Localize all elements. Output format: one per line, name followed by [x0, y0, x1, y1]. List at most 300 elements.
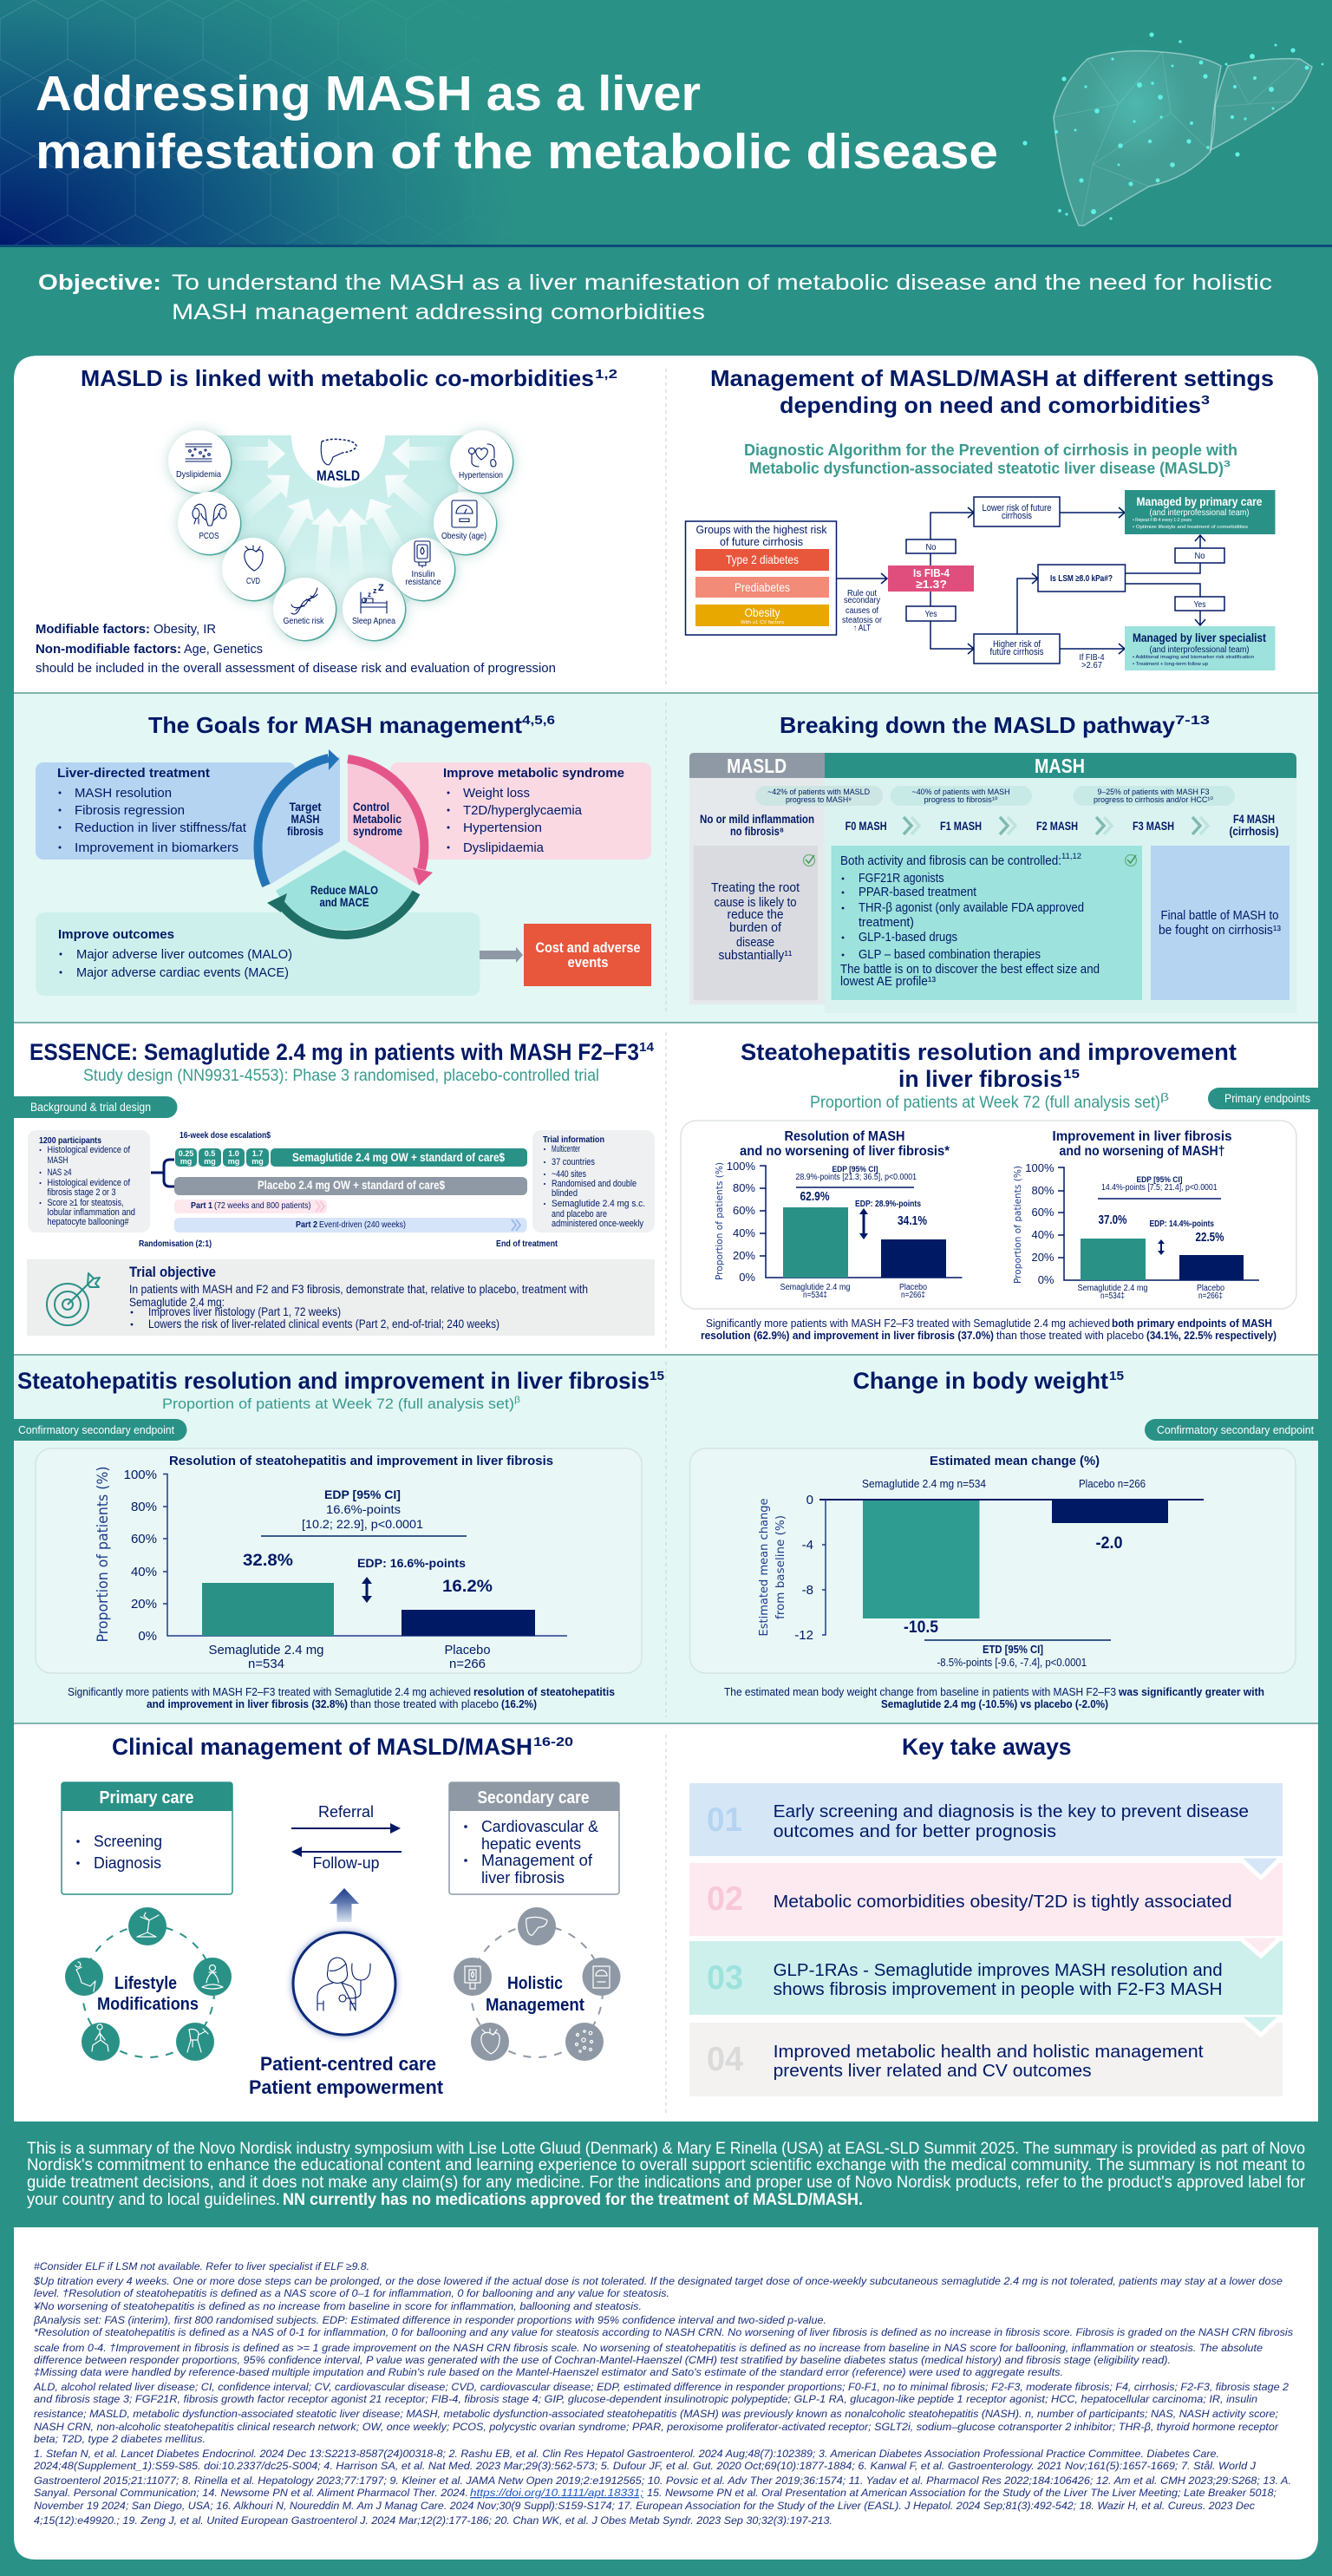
pill: progression cirrhosis: 9–25% of patients with MASH F3	[1098, 788, 1209, 796]
icon: weights	[176, 2023, 214, 2061]
card: secondary care: liver fibrosis	[481, 1869, 565, 1886]
box: high risk groups: Obesity	[744, 605, 780, 619]
icon: doctor	[293, 1932, 395, 2035]
chart: improvement in liver fibrosis: 37.0%	[1098, 1213, 1127, 1227]
stage labels: No or mild inflammation	[700, 812, 814, 826]
card: activity and fibrosis: THR-β agonist (only available FDA approved	[859, 901, 1084, 915]
panel: primary endpoints	[681, 1039, 1318, 1342]
takeaway 04: 04	[707, 2041, 743, 2078]
tab: primary endpoints	[1208, 1088, 1318, 1109]
heading: depending on need and comorbidities	[780, 392, 1201, 418]
card: primary care: Screening	[94, 1833, 162, 1850]
dose escalation	[175, 1130, 271, 1167]
dose escalation: 1.7	[252, 1149, 263, 1158]
text block: abbreviations and footnotes: ‡Missing data were handled by reference-based multiple imputation and Rubin's rule based on the Mantel-Haenszel estimator and Sato's estimate of the standard error (reference) were used to aggregate results.	[34, 2366, 1063, 2378]
box: lower risk: cirrhosis	[1002, 511, 1032, 521]
heading: in liver fibrosis	[898, 1066, 1062, 1092]
text block: abbreviations and footnotes	[33, 2260, 1293, 2527]
note: if FIB-4: If FIB-4	[1079, 653, 1105, 663]
card: activity and fibrosis: The battle is on to discover the best effect size and	[840, 963, 1100, 977]
panel: key take aways	[689, 1734, 1283, 2096]
heading: 7-13	[1175, 713, 1210, 728]
arc arrow: teal	[267, 892, 416, 935]
node: PCOS	[178, 492, 241, 555]
card: activity and fibrosis: PPAR-based treatment	[859, 886, 976, 899]
box: managed by primary care: • Optimize lifestyle and treatment of comorbidities	[1133, 525, 1249, 530]
box: FIB-4	[888, 566, 974, 592]
bar: part 2: Part 2	[296, 1219, 317, 1230]
note: rule out: ↑ ALT	[853, 624, 871, 633]
card: activity and fibrosis: Both activity and fibrosis can be controlled:	[840, 854, 1061, 868]
card: participants: Score ≥1 for steatosis,	[47, 1198, 123, 1208]
card: activity and fibrosis: FGF21R agonists	[859, 872, 944, 886]
card: improve metabolic syndrome: Improve metabolic syndrome	[443, 766, 624, 781]
note: if FIB-4	[1079, 653, 1105, 670]
pill: progression fibrosis: ~40% of patients with MASH	[912, 788, 1009, 796]
card: trial information: Randomised and double	[552, 1179, 637, 1189]
text block: abbreviations and footnotes: *Resolution of steatohepatitis is defined as a NAS of 0-1 for inflammation, 0 for ballooning and any value for steatosis according to NASH CRN. No worsening of liver fibrosis is defined as no increase in fibrosis score. Fibrosis is graded on the NASH CRN fibrosis	[34, 2326, 1293, 2338]
stage labels: F1 MASH	[940, 819, 982, 833]
heading	[710, 365, 1274, 418]
chart: resolution and fibrosis improvement: 60%	[131, 1532, 157, 1546]
subheading: β	[514, 1396, 520, 1405]
box: managed by liver specialist: • Treatment + long-term follow up	[1133, 662, 1208, 667]
card: treating root cause: burden of	[729, 921, 782, 935]
chart: improvement in liver fibrosis: n=534‡	[1100, 1291, 1125, 1301]
chart: improvement in liver fibrosis	[1012, 1129, 1259, 1301]
card: improve outcomes: Major adverse liver outcomes (MALO)	[76, 947, 292, 962]
bar: part 1: Part 1	[191, 1200, 212, 1211]
caption: Significantly more patients with MASH F2–F3 treated with Semaglutide 2.4 mg achieved	[706, 1317, 1110, 1330]
chart: improvement in liver fibrosis: and no worsening of MASH†	[1060, 1144, 1224, 1159]
dose escalation: mg	[228, 1157, 239, 1166]
box: high risk groups: With ≥1 CV factors	[741, 620, 784, 625]
note: rule out: causes of	[846, 606, 878, 616]
panel: section row 4 background	[14, 1355, 1318, 1724]
card: activity and fibrosis: treatment)	[859, 916, 914, 930]
text block: abbreviations and footnotes: and fibrosis stage 3; FGF21R, fibrosis growth factor receptor agonist 21 receptor; FIB-4, fibrosis stage 4; GIP, glucose-dependent insulinotropic polypeptide; GLP-1 RA, glucagon-like peptide 1 receptor agonist; HCC, hepatocellular carcinoma; IR, insulin	[34, 2393, 1257, 2405]
card: primary care: Primary care	[99, 1788, 194, 1808]
chart: resolution of MASH: Placebo	[899, 1283, 927, 1292]
card: chart	[690, 1448, 1296, 1673]
caption: The estimated mean body weight change from baseline in patients with MASH F2–F3	[724, 1685, 1116, 1698]
card: primary care: Diagnosis	[94, 1854, 161, 1872]
box: managed by primary care	[1125, 490, 1275, 534]
caption: than those treated with placebo	[996, 1329, 1144, 1342]
card: trial information: administered once-weekly	[552, 1219, 643, 1229]
takeaway 04: prevents liver related and CV outcomes	[774, 2061, 1092, 2081]
chart: resolution and fibrosis improvement: 80%	[131, 1500, 157, 1514]
bar: part 2	[174, 1218, 527, 1232]
icon: target	[47, 1273, 100, 1325]
box: managed by primary care: Managed by primary care	[1136, 494, 1263, 508]
box: managed by liver specialist: (and interprofessional team)	[1150, 644, 1249, 655]
text block: modifiable factors: should be included in the overall assessment of disease risk and evaluation of progression	[36, 661, 556, 676]
chart: resolution and fibrosis improvement: 32.8%	[243, 1552, 293, 1570]
label: target	[287, 800, 323, 838]
card: participants: 1200 participants	[39, 1135, 101, 1146]
label: reduce: Reduce MALO	[310, 883, 378, 897]
box: Yes (LSM): Yes	[1193, 599, 1205, 610]
bar: part 1: (72 weeks and 800 patients)	[214, 1200, 310, 1211]
diagram: lifestyle modifications: Lifestyle	[114, 1974, 177, 1993]
text block: abbreviations and footnotes: https://doi.org/10.1111/apt.18331;	[470, 2487, 643, 2499]
note: rule out: steatosis or	[842, 616, 883, 625]
icon: glucose meter	[454, 1958, 492, 1996]
stage labels: F3 MASH	[1133, 819, 1174, 833]
text block: abbreviations and footnotes: November 19 2024; San Diego, USA; 16. Alkhouri N, Noureddin M. Am J Manag Care. 2024 Nov;30(9 Suppl):S159-S174; 17. European Association for the Study of the Liver (EASL). J Hepatol. 2024 Sep;81(3):492-542; 18. Wazir H, et al. Cureus. 2023 Dec	[34, 2500, 1255, 2512]
chart: resolution of MASH: 0%	[739, 1271, 755, 1284]
heading: 14	[639, 1040, 655, 1055]
node: Hypertension	[450, 430, 513, 494]
chart: estimated mean change: Estimated mean change	[758, 1499, 771, 1636]
chart: estimated mean change: -2.0	[1096, 1534, 1122, 1553]
card: improve outcomes: Improve outcomes	[58, 927, 174, 942]
text block: abbreviations and footnotes: $Up titration every 4 weeks. One or more dose steps can be prolonged, or the dose lowered if the actual dose is not tolerated. If the designated target dose of once-weekly subcutaneous semaglutide 2.4 mg is not tolerated, patients may stay at a lower dose	[33, 2275, 1283, 2287]
timeline labels: Randomisation (2:1)	[139, 1239, 212, 1249]
panel: section row 3 background	[14, 1023, 1318, 1355]
takeaway 01: 01	[707, 1801, 742, 1839]
diagram: holistic management	[454, 1907, 621, 2061]
card: treating root cause	[694, 846, 818, 1000]
heading: Breaking down the MASLD pathway	[780, 712, 1176, 738]
arrow: follow-up	[291, 1847, 402, 1872]
chart: estimated mean change: Placebo n=266	[1079, 1478, 1146, 1490]
card: secondary care: hepatic events	[481, 1835, 581, 1853]
text block: modifiable factors: Non-modifiable factors:	[36, 642, 181, 657]
text block: symposium disclaimer: your country and to local guidelines.	[27, 2191, 280, 2209]
card: trial information: 37 countries	[552, 1157, 595, 1167]
icon: check	[803, 855, 815, 866]
card: treating root cause: reduce the	[727, 908, 784, 922]
chart: resolution and fibrosis improvement: 20%	[131, 1597, 157, 1612]
box: cost and adverse events: events	[567, 954, 609, 971]
chart: resolution of MASH: 60%	[733, 1204, 755, 1217]
subheading: Proportion of patients at Week 72 (full analysis set)	[162, 1396, 514, 1412]
box: No (LSM): No	[1195, 551, 1205, 561]
bar: placebo arm: Placebo 2.4 mg OW + standard of care$	[258, 1178, 445, 1192]
note: rule out: secondary	[844, 596, 880, 605]
caption: resolution (62.9%) and improvement in liver fibrosis (37.0%)	[701, 1329, 994, 1342]
takeaway 02: 02	[707, 1880, 743, 1918]
label: control: Metabolic	[353, 812, 402, 826]
chart: resolution and fibrosis improvement: n=266	[449, 1657, 486, 1671]
takeaway 01	[689, 1783, 1283, 1878]
card: secondary care	[449, 1782, 619, 1894]
chart: estimated mean change: -8.5%-points [-9.6, -7.4], p<0.0001	[937, 1657, 1087, 1669]
card: liver-directed treatment: Improvement in biomarkers	[75, 840, 238, 855]
tab: MASLD	[689, 753, 825, 778]
tab: confirmatory secondary endpoint: Confirmatory secondary endpoint	[18, 1423, 174, 1436]
chart: resolution and fibrosis improvement: 100%	[124, 1468, 157, 1482]
chart: resolution of MASH: and no worsening of liver fibrosis*	[740, 1144, 950, 1159]
chart: resolution and fibrosis improvement: Proportion of patients (%)	[95, 1466, 112, 1643]
text block: symposium disclaimer: NN currently has no medications approved for the treatment of MASLD/MASH.	[283, 2191, 863, 2209]
chart: improvement in liver fibrosis: n=266‡	[1198, 1291, 1223, 1301]
card: treating root cause: cause is likely to	[715, 896, 796, 910]
diagram: goals wheel	[258, 749, 433, 935]
box: lower risk	[974, 497, 1060, 526]
text block: modifiable factors: Modifiable factors:	[36, 622, 150, 637]
chart: resolution of MASH: Resolution of MASH	[784, 1129, 905, 1144]
text block: abbreviations and footnotes: ALD, alcohol related liver disease; CI, confidence interval; CV, cardiovascular disease; CVD, cardiovascular disease; EDP, estimated difference in responder proportions; F0-F1, no to minimal fibrosis; F2-F3, moderate fibrosis; F4, cirrhosis; F2-F3, fibrosis stage 2	[33, 2381, 1289, 2393]
takeaway 03: shows fibrosis improvement in people with F2-F3 MASH	[774, 1979, 1223, 1999]
box: LSM	[1038, 565, 1126, 592]
chart: resolution and fibrosis improvement: Resolution of steatohepatitis and improvement in liver fibrosis	[169, 1455, 553, 1468]
heading: Management of MASLD/MASH at different settings	[710, 365, 1274, 391]
chart: resolution and fibrosis improvement: 0%	[138, 1629, 157, 1644]
card: trial objective: In patients with MASH and F2 and F3 fibrosis, demonstrate that, relative to placebo, treatment with	[129, 1282, 588, 1296]
heading: 4,5,6	[522, 713, 555, 728]
card: trial information: Multicenter	[552, 1144, 580, 1154]
box: managed by liver specialist: Managed by liver specialist	[1133, 631, 1266, 644]
stage chevrons	[904, 817, 1208, 834]
caption: Semaglutide 2.4 mg (-10.5%) vs placebo (-2.0%)	[881, 1697, 1108, 1710]
chart: improvement in liver fibrosis: 40%	[1031, 1228, 1054, 1241]
chart: estimated mean change: Estimated mean change (%)	[930, 1455, 1100, 1468]
box: Yes (LSM)	[1175, 597, 1224, 611]
panel: ESSENCE study design	[14, 1039, 655, 1336]
text block: modifiable factors	[36, 622, 556, 676]
tab: MASH: MASH	[1035, 755, 1085, 777]
node: Dyslipidemia: Dyslipidemia	[176, 469, 221, 480]
chart: improvement in liver fibrosis: Semaglutide 2.4 mg	[1077, 1284, 1148, 1293]
chart: improvement in liver fibrosis: Proportion of patients (%)	[1012, 1166, 1023, 1284]
card: participants: Histological evidence of	[47, 1145, 131, 1155]
heading: 3	[1201, 393, 1210, 408]
node: Insulin resistance	[392, 538, 456, 602]
card: liver-directed treatment	[36, 762, 296, 860]
card: liver-directed treatment: Reduction in liver stiffness/fat	[75, 821, 247, 835]
caption: Significantly more patients with MASH F2–F3 treated with Semaglutide 2.4 mg achieved	[68, 1685, 471, 1698]
chart: improvement in liver fibrosis: Placebo	[1197, 1284, 1224, 1293]
chart: resolution of MASH: 100%	[727, 1160, 755, 1173]
box: high risk groups: Type 2 diabetes	[726, 552, 799, 566]
stage labels: F2 MASH	[1036, 819, 1078, 833]
arrow: to cost	[480, 947, 523, 963]
box: higher risk	[974, 634, 1060, 664]
chart: resolution and fibrosis improvement: Placebo	[444, 1643, 491, 1657]
text block: abbreviations and footnotes: Sanyal. Personal Communication; 14. Newsome PN et al. Aliment Pharmacol Ther. 2024.	[34, 2487, 468, 2499]
chart: resolution and fibrosis improvement: [10.2; 22.9], p<0.0001	[302, 1517, 423, 1531]
timeline labels	[139, 1239, 558, 1249]
text: patient-centred care: Patient empowerment	[249, 2076, 444, 2098]
diagram: holistic management: Holistic	[507, 1974, 563, 1993]
panel: clinical management	[62, 1734, 621, 2098]
objective: Objective:	[38, 271, 161, 295]
card: trial objective: Lowers the risk of liver-related clinical events (Part 2, end-of-trial; 240 weeks)	[148, 1317, 500, 1330]
text block: abbreviations and footnotes: 1. Stefan N, et al. Lancet Diabetes Endocrinol. 2024 Dec 13:S2213-8587(24)00318-8; 2. Rashu EB, et al. Clin Res Hepatol Gastroenterol. 2024 Aug;48(7):102389; 3. American Diabetes Association Professional Practice Committee. Diabetes Care.	[34, 2448, 1219, 2460]
chart: resolution of MASH: n=266‡	[901, 1291, 925, 1300]
card: improve outcomes	[36, 912, 480, 996]
chart: resolution of MASH	[714, 1129, 963, 1300]
text block: abbreviations and footnotes: #Consider ELF if LSM not available. Refer to liver specialist if ELF ≥9.8.	[34, 2260, 369, 2272]
objective	[38, 271, 1272, 324]
card: participants: NAS ≥4	[47, 1167, 71, 1178]
chart: estimated mean change: -10.5	[904, 1618, 938, 1637]
heading: Steatohepatitis resolution and improvement in liver fibrosis	[17, 1368, 650, 1394]
chart: resolution of MASH: Proportion of patients (%)	[714, 1162, 725, 1280]
bar: semaglutide arm	[271, 1148, 527, 1167]
chart: estimated mean change: 0	[806, 1493, 813, 1507]
card: charts	[681, 1121, 1296, 1309]
arrow: referral: Referral	[318, 1803, 374, 1821]
text block: abbreviations and footnotes: 4;15(12):e49920.; 19. Zeng J, et al. United European Gastroenterol J. 2024 Mar;12(2):177-186; 20. Chan WK, et al. J Obes Metab Syndr. 2023 Sep 30;32(3):197-213.	[34, 2514, 832, 2527]
icon: stretch	[128, 1907, 166, 1945]
panel: change in body weight	[690, 1368, 1318, 1710]
card: improve metabolic syndrome: T2D/hyperglycaemia	[463, 803, 583, 818]
chart: improvement in liver fibrosis: EDP [95% CI]	[1136, 1175, 1183, 1185]
chart: improvement in liver fibrosis: Improvement in liver fibrosis	[1053, 1129, 1232, 1144]
box: Yes	[906, 606, 956, 621]
takeaway 04: Improved metabolic health and holistic management	[774, 2042, 1204, 2062]
text block: symposium disclaimer: guide treatment decisions, and it does not make any claim(s) for any medicine. For the indications and proper use of Novo Nordisk products, refer to the product's approved label for	[27, 2174, 1306, 2192]
chart: improvement in liver fibrosis: 20%	[1031, 1251, 1054, 1264]
card: trial objective: Semaglutide 2.4 mg:	[129, 1295, 225, 1309]
card: secondary care: Cardiovascular &	[481, 1818, 598, 1835]
card: treating root cause: Treating the root	[711, 881, 800, 895]
card: participants: Histological evidence of	[47, 1178, 131, 1188]
card: participants	[28, 1130, 150, 1232]
chart: resolution and fibrosis improvement	[95, 1455, 567, 1671]
node: Sleep Apnea	[343, 578, 406, 642]
chart: resolution of MASH: Semaglutide 2.4 mg	[780, 1283, 850, 1292]
chart: estimated mean change: -4	[802, 1538, 813, 1553]
chart: resolution of MASH: 20%	[733, 1249, 755, 1262]
chart: estimated mean change: ETD [95% CI]	[983, 1644, 1043, 1656]
icon: cells	[565, 2023, 604, 2061]
tab: primary endpoints: Primary endpoints	[1224, 1092, 1310, 1105]
node: Dyslipidemia	[168, 430, 232, 494]
chart: resolution of MASH: EDP [95% CI]	[832, 1165, 878, 1174]
caption	[68, 1685, 615, 1710]
subheading: Proportion of patients at Week 72 (full analysis set)	[810, 1094, 1160, 1112]
caption: both primary endpoints of MASH	[1112, 1317, 1272, 1330]
box: FIB-4: Is FIB-4	[913, 566, 950, 579]
icon: check	[1126, 855, 1136, 866]
note: rule out: Rule out	[847, 589, 877, 598]
text block: abbreviations and footnotes: βAnalysis set: FAS (interim), first 800 randomised subjects. EDP: Estimated difference in responder proportions with 95% confidence interval and two-sided p-value.	[33, 2314, 826, 2326]
box: high risk groups: Prediabetes	[735, 580, 790, 594]
subheading	[744, 441, 1237, 477]
box: No (LSM)	[1175, 548, 1224, 563]
card: activity and fibrosis	[832, 846, 1142, 1000]
dose escalation: 0.5	[205, 1149, 215, 1158]
stage labels: F4 MASH	[1233, 812, 1275, 826]
title: Addressing MASH as a liver	[36, 66, 701, 121]
chart: estimated mean change: -12	[794, 1628, 813, 1643]
card: secondary care: Secondary care	[477, 1788, 590, 1808]
card: trial objective	[27, 1259, 655, 1336]
node: Sleep Apnea: z	[368, 591, 371, 598]
timeline labels: End of treatment	[496, 1239, 558, 1249]
node: Genetic risk	[273, 578, 336, 642]
tab: confirmatory secondary endpoint: Confirmatory secondary endpoint	[1157, 1423, 1314, 1436]
stage labels: F0 MASH	[846, 819, 887, 833]
chart: improvement in liver fibrosis: 60%	[1031, 1206, 1054, 1219]
arrow: up from patient	[330, 1888, 359, 1922]
box: high risk groups	[685, 521, 836, 635]
panel: MASLD comorbidities	[36, 365, 617, 676]
text: patient-centred care	[249, 2053, 444, 2098]
chart: estimated mean change	[758, 1455, 1204, 1669]
icon: heart	[471, 2023, 509, 2061]
text block: abbreviations and footnotes: beta; T2D, type 2 diabetes mellitus.	[34, 2433, 206, 2445]
box: managed by primary care: (and interprofessional team)	[1150, 507, 1249, 518]
pill: progression fibrosis	[890, 786, 1032, 806]
heading: Change in body weight	[853, 1368, 1108, 1394]
card: participants: lobular inflammation and	[47, 1207, 135, 1218]
card: improve metabolic syndrome: Weight loss	[463, 786, 530, 801]
card: primary care	[62, 1782, 232, 1894]
text block: abbreviations and footnotes: 2024;48(Supplement_1):S59-S85. doi:10.2337/dc25-S004; 4. Harrison SA, et al. Nat Med. 2023 Mar;29(3):562-573; 5. Dufour JF, et al. Gut. 2020 Oct;69(10):1877-1884; 6. Kanwal F, et al. Gastroenterology. 2021 Nov;161(5):1657-1669; 7. Stål. World J	[33, 2460, 1257, 2472]
heading: Clinical management of MASLD/MASH	[112, 1734, 532, 1760]
card: trial objective: Trial objective	[129, 1264, 216, 1280]
text block: abbreviations and footnotes: NASH CRN, non-alcoholic steatohepatitis clinical research network; OW, once weekly; PCOS, polycystic ovarian syndrome; PPAR, peroxisome proliferator-activated receptor; SGLT2i, sodium–glucose cotransporter 2 inhibitor; THR-β, thyroid hormone receptor	[34, 2421, 1279, 2433]
icon: lunges	[82, 2023, 120, 2061]
node: CVD: CVD	[246, 576, 260, 586]
tab: MASH	[825, 753, 1296, 778]
text block: modifiable factors: Age, Genetics	[184, 642, 263, 657]
node: CVD	[222, 538, 286, 602]
header banner	[0, 0, 1332, 247]
takeaway 04	[689, 2023, 1283, 2096]
card: final battle: be fought on cirrhosis¹³	[1159, 924, 1281, 938]
card: improve outcomes: Major adverse cardiac events (MACE)	[76, 965, 289, 980]
label: reduce	[310, 883, 378, 909]
text block: symposium disclaimer	[27, 2140, 1306, 2209]
node: Sleep Apnea: Sleep Apnea	[352, 616, 395, 626]
chart: resolution and fibrosis improvement: n=534	[248, 1657, 284, 1671]
heading: 1,2	[595, 367, 617, 382]
card: trial objective: Improves liver histology (Part 1, 72 weeks)	[148, 1304, 341, 1318]
card: improve metabolic syndrome: Hypertension	[463, 821, 542, 835]
tab: MASLD: MASLD	[727, 755, 787, 777]
dose escalation: mg	[204, 1157, 216, 1166]
icon: crunches	[65, 1958, 103, 1996]
caption	[724, 1685, 1264, 1710]
chart: estimated mean change: from baseline (%)	[774, 1515, 787, 1619]
box: lower risk: Lower risk of future	[982, 503, 1051, 513]
box: No	[906, 539, 956, 553]
card: activity and fibrosis: GLP-1-based drugs	[859, 931, 957, 945]
box: managed by primary care: • Repeat FIB-4 every 1-2 years	[1133, 518, 1192, 523]
chart: improvement in liver fibrosis: 100%	[1025, 1161, 1054, 1174]
caption: and improvement in liver fibrosis (32.8%)	[147, 1697, 348, 1710]
stage labels: (cirrhosis)	[1230, 824, 1278, 838]
box: managed by liver specialist	[1125, 626, 1275, 670]
pill: progression fibrosis: progress to fibrosis¹⁰	[924, 795, 998, 804]
takeaway 01: Early screening and diagnosis is the key to prevent disease	[774, 1801, 1249, 1821]
text block: abbreviations and footnotes: ¥No worsening of steatohepatitis is defined as no increase from baseline in score for inflammation, ballooning and steatosis.	[34, 2300, 642, 2312]
diagram: lifestyle modifications: Modifications	[97, 1995, 199, 2014]
text block: abbreviations and footnotes: 15. Newsome PN et al. Oral Presentation at American Association for the Study of the Liver The Liver Meeting; Late Breaker 5018;	[647, 2487, 1276, 2499]
node: Insulin resistance: resistance	[406, 577, 441, 587]
subheading: Study design (NN9931-4553): Phase 3 randomised, placebo-controlled trial	[83, 1067, 599, 1085]
takeaway 02	[689, 1863, 1283, 1956]
chart: resolution and fibrosis improvement: 16.2%	[442, 1578, 493, 1596]
label: MASLD: MASLD	[317, 468, 360, 484]
card: treating root cause: substantially¹¹	[718, 949, 793, 963]
icon: yoga	[193, 1958, 232, 1996]
bar: part 2: Event-driven (240 weeks)	[319, 1219, 406, 1230]
text block: symposium disclaimer: Nordisk's commitment to enhance the educational content and learning experience to overall support scientific exchange with the medical community. The summary is not meant to	[27, 2156, 1305, 2174]
card: trial information: blinded	[552, 1188, 578, 1199]
arrow: referral	[291, 1803, 401, 1834]
node: Sleep Apnea: z	[373, 586, 377, 595]
card: liver-directed treatment: Fibrosis regression	[75, 803, 185, 818]
card: treating root cause: disease	[736, 936, 774, 950]
